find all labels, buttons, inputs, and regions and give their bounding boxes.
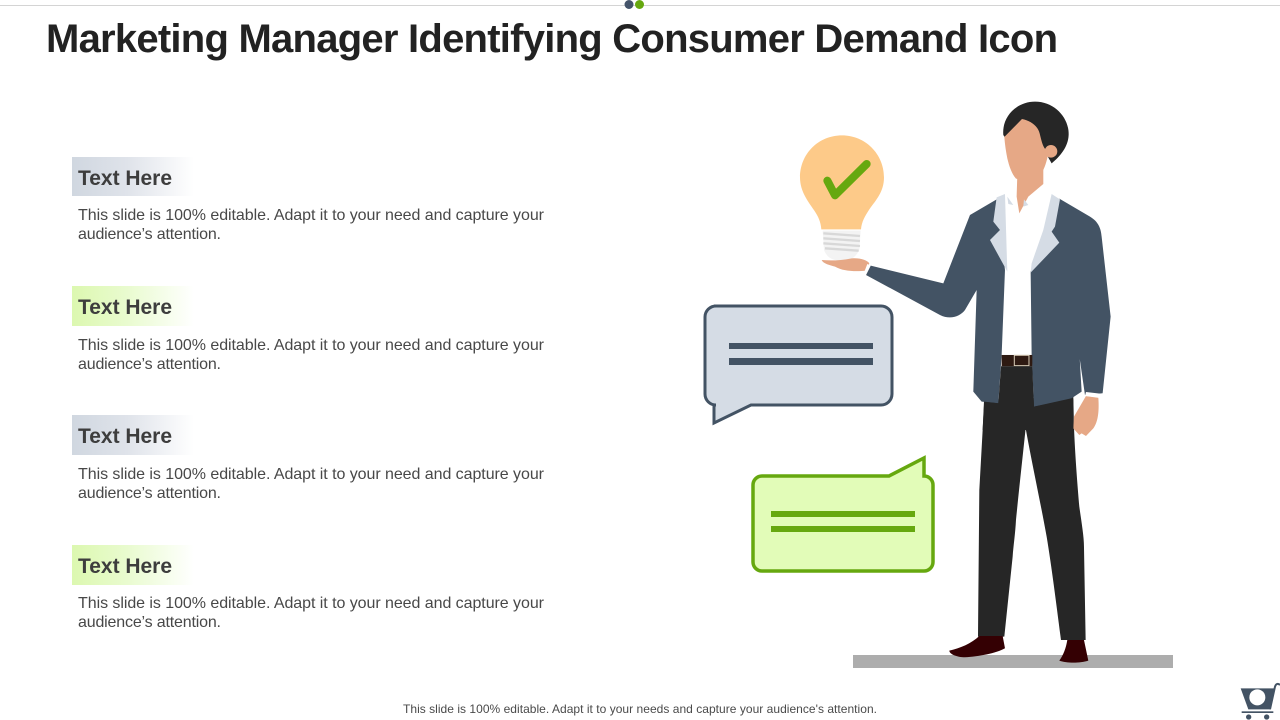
ground bar	[853, 655, 1173, 668]
heading 2	[72, 286, 194, 326]
body 3	[78, 466, 545, 502]
body 2: This slide is 100% editable. Adapt it to your need and capture your	[78, 337, 545, 354]
body 2	[78, 337, 545, 373]
neck	[1017, 168, 1043, 213]
text block 2	[72, 286, 545, 373]
heading 1: Text Here	[78, 167, 172, 190]
collar	[1007, 197, 1013, 205]
hair	[1003, 102, 1069, 163]
shirt	[1002, 188, 1055, 355]
footer note: This slide is 100% editable. Adapt it to your needs and capture your audience's attention.	[403, 702, 877, 716]
trousers and shoes	[949, 397, 1088, 663]
body 3: audience’s attention.	[78, 485, 221, 502]
speech bubble: green	[753, 458, 933, 571]
upper hand	[822, 258, 869, 271]
icon: light bulb with check mark	[800, 135, 884, 261]
heading 4	[72, 545, 194, 585]
figure: marketing manager	[822, 102, 1111, 663]
body 4: This slide is 100% editable. Adapt it to your need and capture your	[78, 595, 545, 612]
text block 4	[72, 545, 545, 631]
lower hand	[1073, 396, 1099, 436]
body 4: audience’s attention.	[78, 614, 221, 631]
body 1: This slide is 100% editable. Adapt it to your need and capture your	[78, 207, 545, 224]
header dots	[624, 0, 644, 9]
text block 3	[72, 415, 545, 502]
body 4	[78, 595, 545, 631]
heading 2: Text Here	[78, 296, 172, 319]
body 1	[78, 207, 545, 243]
body 1: audience’s attention.	[78, 226, 221, 243]
body 2: audience’s attention.	[78, 356, 221, 373]
heading 3: Text Here	[78, 425, 172, 448]
heading 3	[72, 415, 194, 455]
belt	[1002, 355, 1032, 366]
heading 4: Text Here	[78, 555, 172, 578]
body 3: This slide is 100% editable. Adapt it to your need and capture your	[78, 466, 545, 483]
jacket body	[866, 199, 1111, 407]
icon: shopping cart	[1241, 684, 1280, 720]
ear	[1045, 145, 1057, 158]
trousers between jacket	[983, 366, 1073, 430]
heading 1	[72, 157, 194, 196]
cuffs	[864, 264, 871, 275]
title: Marketing Manager Identifying Consumer Demand Icon	[46, 17, 1058, 61]
face	[1004, 119, 1048, 180]
speech bubble: slate	[705, 306, 892, 423]
lapels	[990, 194, 1007, 272]
text block 1	[72, 157, 545, 243]
